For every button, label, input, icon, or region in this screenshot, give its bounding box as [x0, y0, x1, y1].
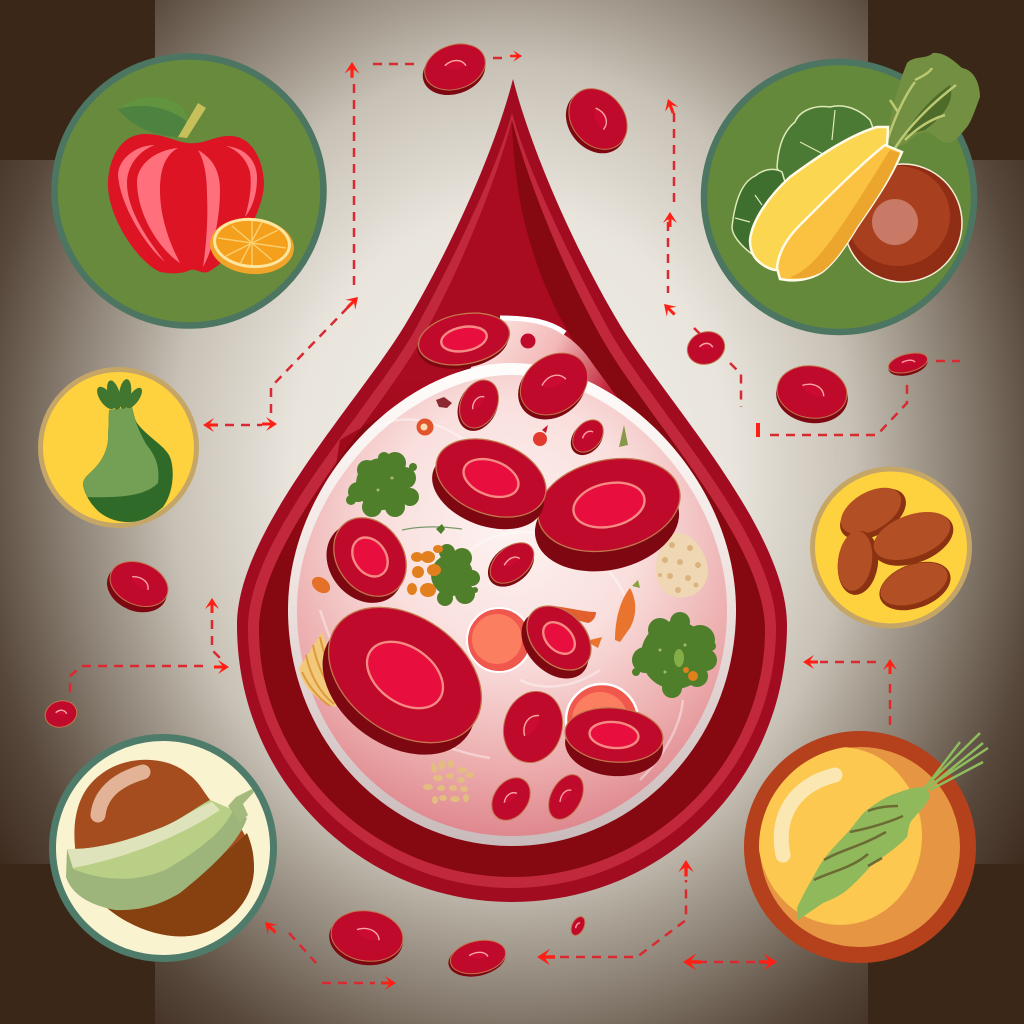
- cell large lower left: [297, 579, 507, 783]
- icon: red apple: [108, 134, 264, 273]
- drop left fold: [259, 120, 628, 630]
- cell centre: [421, 425, 557, 544]
- grain cluster right: [656, 533, 708, 598]
- small bits: [416, 334, 628, 447]
- short bar marker: [756, 423, 760, 437]
- greens cluster left: [346, 452, 419, 517]
- cell bottom right: [541, 769, 591, 825]
- drop dark inner band: [259, 120, 765, 877]
- carrot pieces: [309, 574, 640, 648]
- cell right: [773, 361, 851, 428]
- drop light rim: [248, 113, 776, 888]
- cell near drop right: [683, 326, 729, 370]
- icon: bright inner disc: [758, 747, 922, 925]
- cell lower centre: [496, 685, 570, 769]
- panel: nut and zucchini: [52, 738, 274, 958]
- icon: zucchini: [66, 789, 254, 910]
- dashed arrows: [70, 58, 960, 983]
- icon: brown nut: [74, 760, 254, 936]
- panel: golden circle with asparagus: [752, 733, 988, 955]
- icon: bean four: [873, 553, 957, 619]
- cell far left: [42, 697, 80, 731]
- icon: nut shadow: [107, 833, 254, 936]
- cell tiny bottom: [568, 914, 588, 938]
- cell top centre: [416, 36, 492, 103]
- icon: orange slice: [208, 214, 296, 278]
- icon: gourd body: [83, 407, 173, 522]
- cell top right: [553, 77, 639, 165]
- thin herb sprig: [402, 524, 462, 534]
- cell left: [100, 553, 175, 621]
- icon: gourd stem: [94, 378, 145, 412]
- blood pool: [288, 318, 736, 846]
- icon: highlight: [781, 775, 835, 855]
- greens cluster right: [632, 612, 717, 698]
- panel: apple and orange: [54, 56, 324, 326]
- icon: bean three: [865, 502, 961, 576]
- blood drop: [237, 79, 787, 902]
- red blood cells inside the drop: [297, 306, 689, 828]
- cell small centre: [480, 534, 542, 596]
- icon: brown vegetable: [844, 164, 962, 282]
- cell far right: [886, 349, 930, 380]
- icon: stem: [178, 103, 206, 138]
- greens and carrots cluster centre: [407, 544, 480, 606]
- cell large right: [526, 446, 689, 584]
- pool fill: [297, 375, 727, 836]
- salmon slices: [467, 608, 638, 756]
- icon: bean two: [834, 529, 882, 597]
- panel: green gourd: [40, 370, 196, 526]
- cell top: [413, 306, 514, 376]
- cell bottom left: [326, 906, 406, 970]
- icon: leaf: [118, 97, 188, 137]
- cell left: [311, 504, 421, 618]
- panel: squash and greens: [704, 53, 980, 332]
- pool wall: [288, 363, 736, 846]
- upper lobe of pool: [470, 318, 630, 425]
- icon: nut highlight: [98, 772, 143, 815]
- grain cluster bottom: [423, 760, 474, 804]
- icon: asparagus: [797, 787, 930, 920]
- icon: bean one: [831, 478, 915, 550]
- icon: yellow squash: [750, 127, 902, 280]
- lobe highlight: [500, 318, 565, 333]
- cell lower right: [562, 704, 666, 780]
- cell mid right: [508, 593, 604, 692]
- icon: gourd light side: [83, 407, 158, 497]
- cell small upper: [450, 374, 506, 438]
- icon: asparagus blades: [925, 733, 988, 790]
- icon: lettuce leaves: [732, 106, 873, 254]
- cell bottom centre: [445, 936, 509, 982]
- pasta cluster left: [299, 632, 345, 707]
- cell upper right: [506, 340, 600, 432]
- drop outer shell: [237, 79, 787, 902]
- icon: celery top: [885, 53, 980, 148]
- arrow heads: [203, 50, 897, 990]
- panel: beans: [812, 469, 970, 626]
- cell small right: [564, 414, 610, 462]
- cell bottom left: [484, 770, 538, 828]
- swirl highlights: [320, 419, 683, 780]
